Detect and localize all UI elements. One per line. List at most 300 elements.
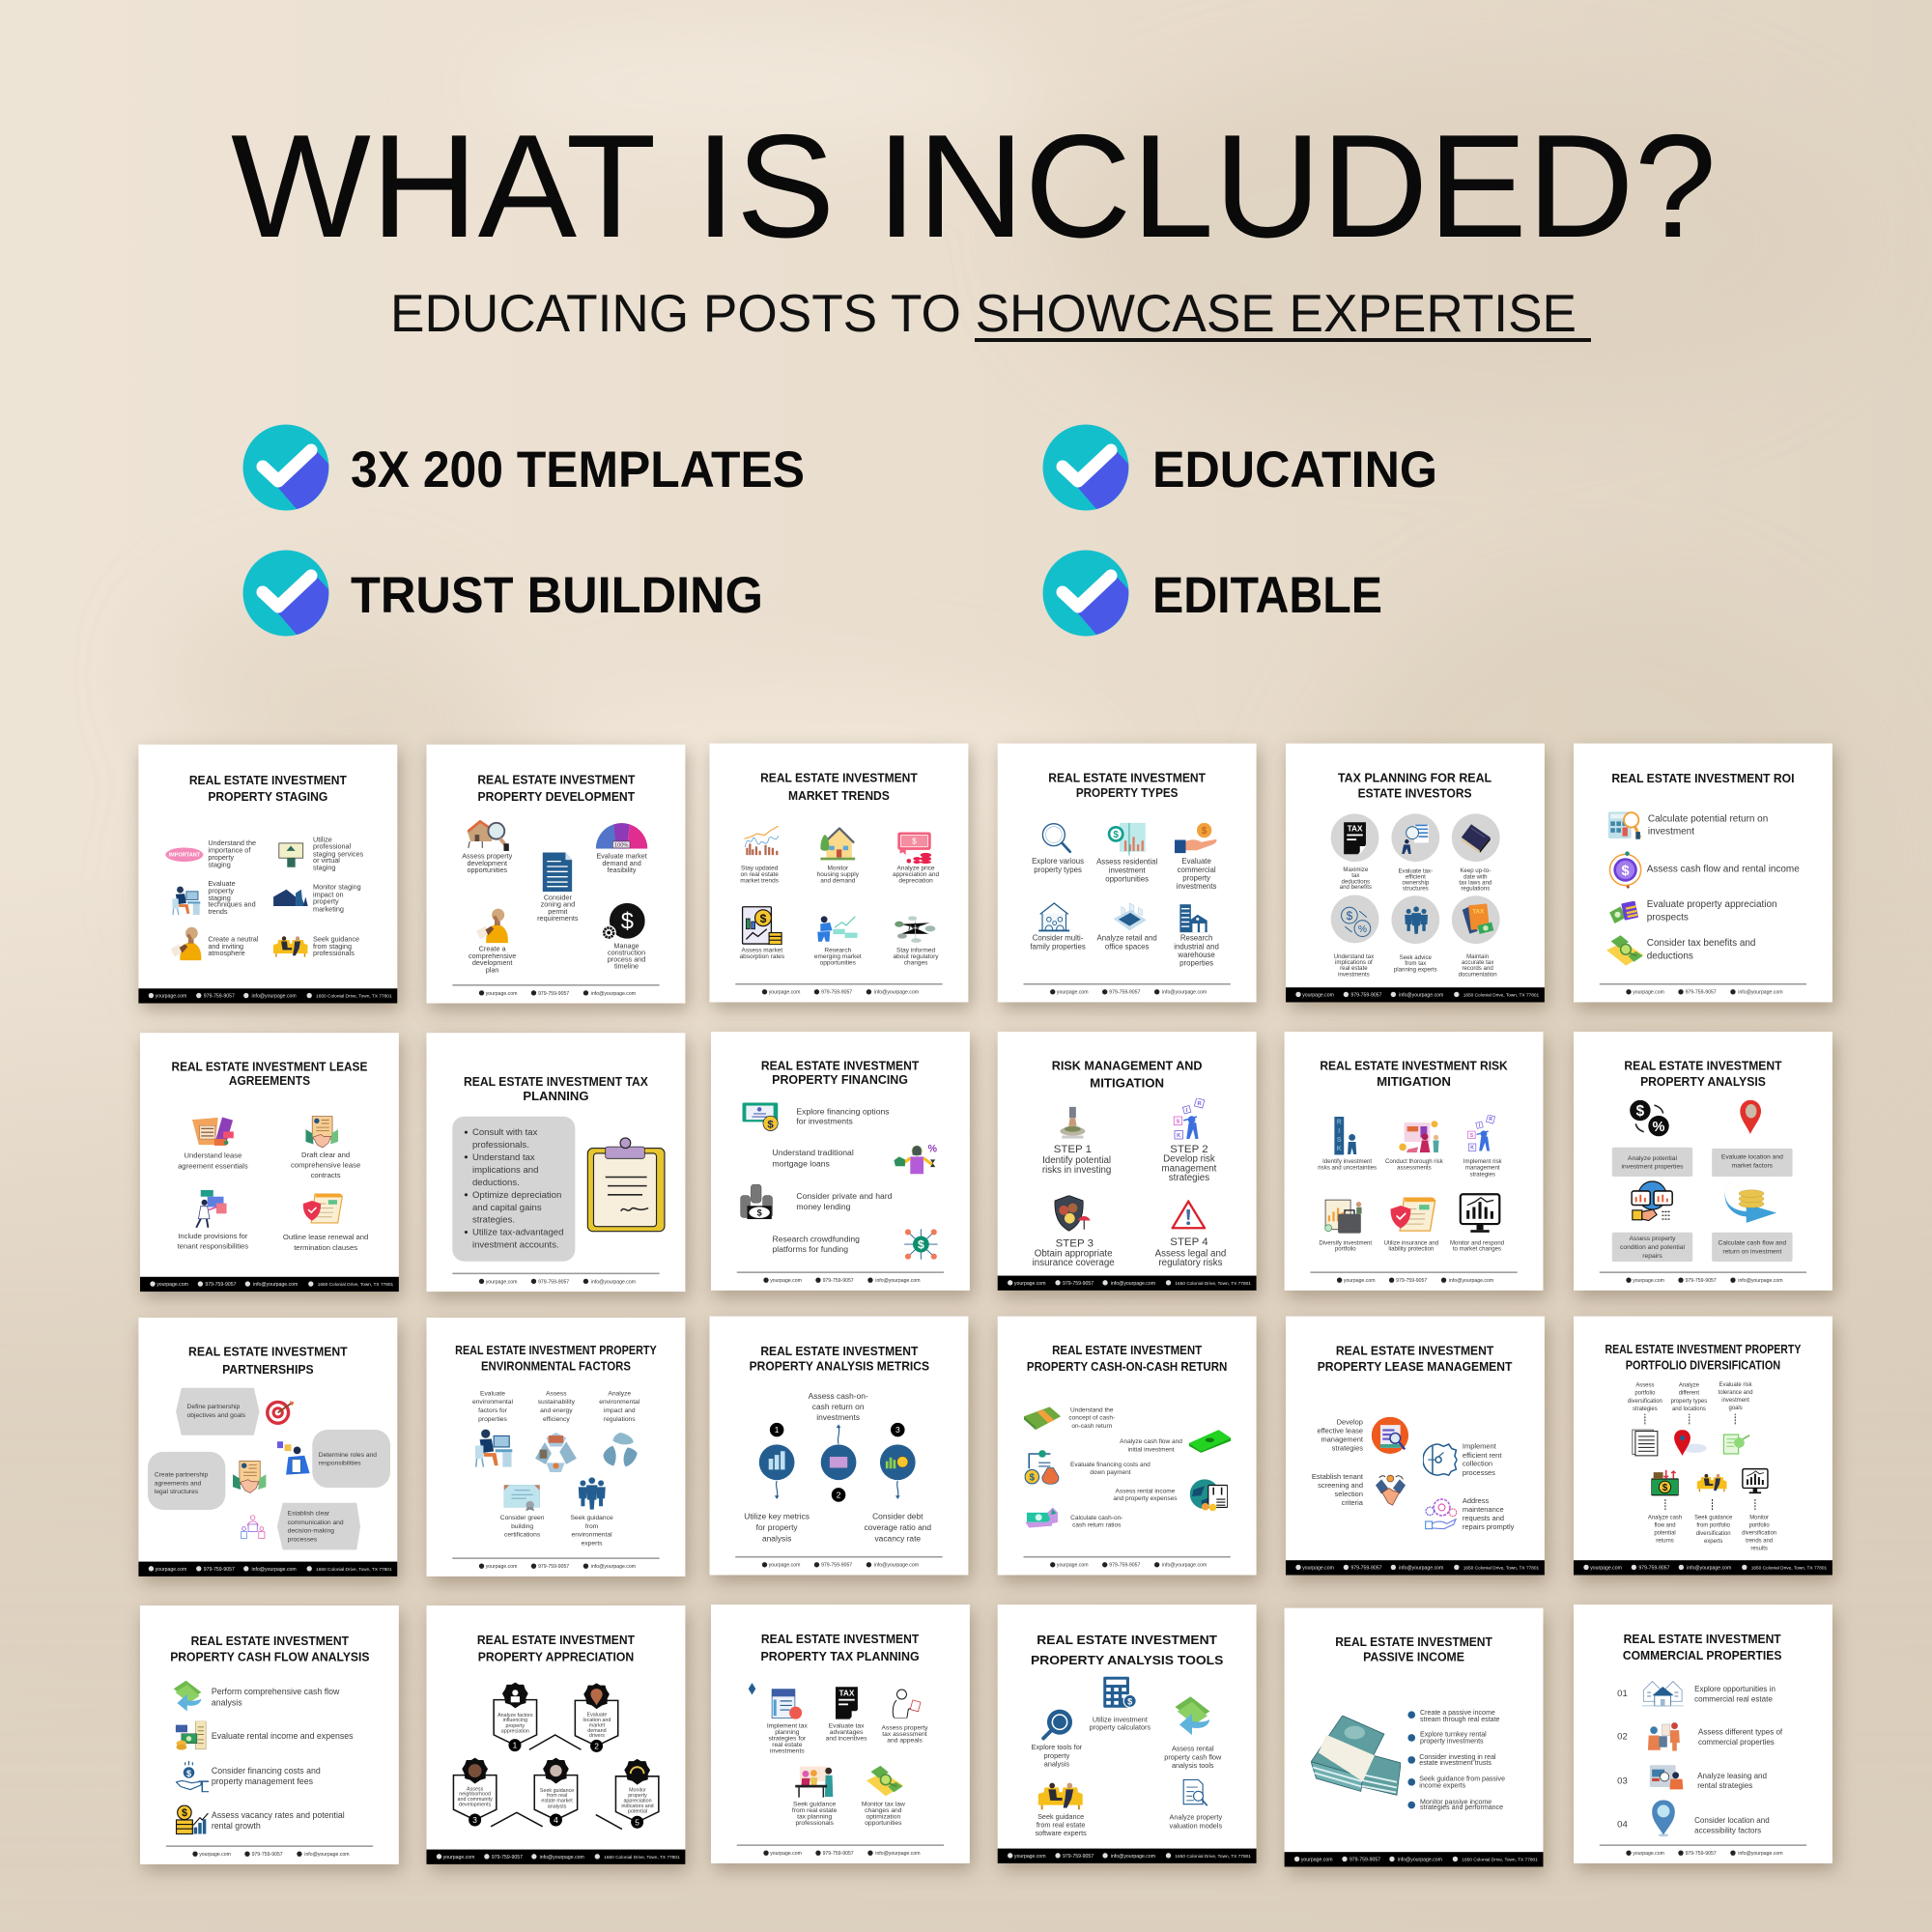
icon: green document [1723,1435,1749,1454]
text: development steps: requirements [537,914,579,923]
text: left labels: effective lease [1317,1427,1363,1435]
icon: teal money [1025,1507,1058,1528]
text: cash flow list: analysis [212,1697,242,1707]
text: development steps: process and [608,955,645,964]
text: development steps: feasibility [608,866,637,874]
footer bar: yourpage.com [443,1855,474,1861]
text: left labels: selection [1335,1490,1363,1498]
text: property labels: investment [1109,867,1146,875]
footer line and contacts: info@yourpage.com [1162,1563,1207,1569]
text: tax planning labels: and incentives [826,1735,867,1742]
text: lease labels: Outline lease renewal and [283,1233,368,1241]
text: tax labels: records and [1462,965,1493,972]
text: hexagon labels: property [506,1723,525,1729]
text: cash flow list: Perform comprehensive cash flow [212,1687,340,1696]
text: staging tips: impact on [313,890,344,898]
text: partnership labels: decision-making [288,1528,334,1535]
text: commercial labels: Consider location and [1694,1816,1770,1825]
grey bullet box: deductions. [472,1178,520,1188]
text: environmental labels: Analyze [608,1390,631,1397]
text: trend labels: appreciation and [893,871,939,878]
text: development steps: comprehensive [469,952,516,960]
text: property labels: investments [1177,882,1217,891]
text: environmental labels: environmental [572,1532,612,1539]
grey bullet box: investment accounts. [472,1240,559,1251]
text: analysis labels: Assess property [1630,1236,1676,1242]
footer bar: 1650 Colonial Drive, Town, TX 77801 [1462,1857,1538,1862]
footer bar: 979-759-9057 [204,1567,235,1573]
text: analysis labels: return on investment [1722,1249,1781,1256]
icon: people network [241,1516,265,1538]
panel: property appreciation: REAL ESTATE INVESTMENT [477,1634,635,1647]
footer bar: 979-759-9057 [1638,1565,1670,1571]
text: hexagon labels: property [628,1793,647,1799]
text: development steps: development [467,859,507,867]
text: right labels: Address [1463,1496,1490,1505]
text: income list: property investments [1420,1738,1484,1745]
text: staging tips: atmosphere [208,949,245,957]
text: roi list: Assess cash flow and rental income [1647,864,1800,874]
text: partnership labels: objectives and goals [187,1412,246,1419]
text: development steps: zoning and [541,900,575,909]
text: tax labels: regulations [1461,886,1490,893]
panel: property tax planning: REAL ESTATE INVESTMENT [761,1633,920,1646]
text: tax planning labels: professionals [795,1820,835,1827]
text: staging tips: Utilize [313,836,332,844]
grey bullet box: professionals. [472,1140,529,1151]
icon: globe and report [1190,1479,1228,1511]
icon: shield and document [1391,1198,1435,1231]
number badges: 4 [554,1815,558,1825]
text: commercial labels: accessibility factors [1694,1827,1761,1835]
panel: market trends: MARKET TRENDS [788,789,890,803]
text: tax labels: tax [1351,872,1359,879]
text: tax planning labels: Monitor tax law [862,1802,905,1808]
icon: red pin [1674,1430,1707,1456]
text: cash flow list: Assess vacancy rates and potential [212,1810,345,1820]
text: bottom labels: potential [1654,1530,1676,1536]
text: environmental labels: experts [582,1540,603,1547]
text: financing list: money lending [796,1202,851,1211]
text: roi list: investment [1648,827,1694,838]
panel: tax planning: REAL ESTATE INVESTMENT TAX [464,1075,648,1089]
footer bar [140,1277,399,1292]
panel: analysis metrics: PROPERTY ANALYSIS METRICS [750,1359,929,1373]
grey bullet box: and capital gains [472,1203,542,1213]
text: metric labels: Assess cash-on- [809,1391,868,1401]
text: step descriptions: Develop risk [1163,1154,1215,1165]
icon: dollar and percent [1630,1100,1669,1136]
text: hexagon labels: appreciation [501,1728,529,1734]
text: step descriptions: regulatory risks [1158,1258,1223,1268]
text: hexagon labels: market [589,1723,606,1729]
text: development steps: Consider [544,893,572,901]
icon: certificate [504,1485,540,1511]
text: hexagon labels: estate market [541,1799,573,1804]
text: development steps: construction [608,948,645,956]
text: tax labels: Seek advice [1400,954,1433,961]
text: development steps: Manage [613,942,639,951]
text: tax planning labels: from real estate [792,1807,838,1814]
number badges: 2 [594,1741,599,1750]
text: numbers: 04 [1617,1819,1628,1830]
text: step descriptions: management [1161,1163,1217,1174]
text: top labels: goals [1729,1406,1743,1411]
text: mitigation labels: strategies [1469,1171,1495,1178]
text: development steps: Create a [479,945,507,953]
blue metric circles with arrows [759,1424,916,1499]
text: left labels: strategies [1332,1444,1363,1453]
footer bar [998,1849,1257,1863]
text: property labels: Assess residential [1096,858,1157,867]
footer line and contacts: 979-759-9057 [823,1851,854,1857]
footer line and contacts: yourpage.com [486,991,517,997]
panel: analysis metrics: REAL ESTATE INVESTMENT [760,1345,919,1358]
feature: 3x 200 templates: 3X 200 TEMPLATES [351,441,805,498]
footer bar: 979-759-9057 [1350,1565,1382,1571]
icon: bright bill [1189,1430,1231,1453]
grey label shapes [148,1388,390,1549]
footer line and contacts: info@yourpage.com [874,1563,919,1569]
text: bottom labels: Monitor [1749,1515,1769,1520]
text: staging tips: trends [208,907,228,916]
icon: couch [1697,1474,1726,1492]
icon: tax document [1344,822,1366,854]
grey bullet box: Optimize depreciation [472,1190,561,1201]
text: return labels: Calculate cash-on- [1070,1515,1122,1521]
text: analysis labels: Calculate cash flow and [1719,1239,1786,1246]
text: tax planning labels: tax planning [797,1814,832,1821]
footer line and contacts [737,1271,944,1284]
text: step descriptions: Identify potential [1042,1155,1111,1166]
text: left labels: screening and [1318,1481,1363,1490]
text: commercial labels: Assess different types of [1698,1728,1783,1737]
text: lease labels: agreement essentials [178,1161,248,1170]
text: tax labels: Maintain [1466,953,1489,960]
footer line and contacts: info@yourpage.com [1449,1278,1493,1284]
footer line and contacts: info@yourpage.com [874,990,919,996]
text: mitigation labels: management [1465,1165,1500,1172]
text: income list: Consider investing in real [1419,1754,1496,1761]
text: return labels: Understand the [1070,1407,1114,1414]
icon: hand and dollar [177,1761,209,1792]
footer line and contacts [1310,1271,1518,1284]
text: roi list: prospects [1647,913,1689,923]
text: right labels: maintenance [1463,1505,1504,1514]
text: roi list: deductions [1647,951,1693,961]
panel: property types: PROPERTY TYPES [1076,786,1178,800]
text: mitigation labels: Utilize insurance and [1384,1239,1438,1246]
text: bottom labels: returns [1656,1538,1674,1544]
panel: commercial properties: REAL ESTATE INVESTMENT [1624,1633,1781,1646]
icon: clipboard [587,1138,665,1232]
footer line and contacts [737,1844,944,1857]
footer bar: 979-759-9057 [1350,992,1382,998]
text: partnership labels: Establish clear [288,1511,330,1518]
text: development steps: timeline [614,962,639,971]
text: tax labels: tax laws and [1459,879,1492,886]
text: steps: STEP 1 [1054,1144,1092,1155]
icon: warehouse [1179,904,1208,932]
text: environmental labels: impact and [604,1407,636,1414]
black number badges: 3 [895,1425,900,1435]
text: tax labels: planning experts [1394,966,1437,973]
text: income list: Explore turnkey rental [1420,1731,1487,1738]
text: tax labels: Keep up-to- [1460,867,1491,874]
text: trend labels: Monitor [827,865,849,871]
icon: book [1462,824,1491,853]
text: top labels: and locations [1672,1406,1706,1412]
feature: editable: EDITABLE [1152,567,1382,624]
footer bar [138,1562,397,1577]
icon: blue pin [1652,1800,1675,1836]
icon: risk blocks [1334,1117,1356,1154]
text: financing list: Consider private and hard [796,1191,893,1201]
text: tax planning labels: Implement tax [767,1722,808,1729]
panel: risk mitigation: REAL ESTATE INVESTMENT RISK [1320,1059,1508,1072]
icon: woman with options [894,1144,937,1174]
text: staging tips: property [313,897,339,906]
text: metric labels: for property [756,1522,798,1532]
icon: market chart [744,826,779,855]
text: property labels: office spaces [1105,942,1150,951]
grey label boxes [1612,1148,1793,1262]
footer line and contacts: info@yourpage.com [1738,990,1783,996]
panel: cash flow analysis [140,1605,402,1871]
icon: green money [1024,1406,1061,1430]
icon: monitors [1632,1181,1672,1221]
icon: people [1648,1722,1680,1751]
footer bar [427,1850,685,1864]
text: property labels: property types [1034,866,1082,874]
text: staging tips: professional [313,842,352,851]
text: tax labels: Evaluate tax- [1398,868,1433,875]
text: top labels: Analyze [1679,1383,1700,1389]
text: analysis labels: condition and potential [1620,1244,1685,1251]
text: metric labels: cash return on [812,1402,865,1411]
text: analysis labels: market factors [1732,1162,1774,1169]
footer bar: 1650 Colonial Drive, Town, TX 77801 [1751,1565,1828,1571]
icon: map [1606,935,1643,966]
icon: warning triangle [1173,1202,1205,1228]
footer line and contacts: 979-759-9057 [538,1564,569,1570]
footer bar [1574,1560,1833,1575]
icon: purple coin [1610,851,1641,889]
panel: property financing [711,1032,973,1297]
grey bullet box: implications and [472,1165,538,1176]
icon: money with arrows [1651,1470,1679,1495]
panel: partnerships: REAL ESTATE INVESTMENT [188,1345,348,1358]
icon: house [820,828,855,860]
footer bar: 1650 Colonial Drive, Town, TX 77801 [318,1282,394,1288]
footer line and contacts: 979-759-9057 [538,1279,569,1285]
text: bottom labels: results [1750,1546,1768,1551]
text: income list: income experts [1419,1783,1466,1790]
text: commercial labels: rental strategies [1697,1781,1752,1790]
icon: price card [897,832,931,864]
icon: document [543,852,572,892]
icon: documents [1633,1430,1658,1456]
panel: analysis tools [998,1605,1260,1870]
panel: portfolio diversification: PORTFOLIO DIVERSIFICATION [1626,1358,1780,1372]
text: tax labels: date with [1463,873,1488,880]
text: partnership labels: Define partnership [187,1404,240,1410]
footer line and contacts: yourpage.com [769,990,800,996]
icon: people and board [1399,1121,1439,1152]
text: tax planning labels: tax assessment [882,1731,927,1738]
text: staging tips: from staging [313,942,352,951]
text: property labels: industrial and [1174,942,1219,951]
text: trend labels: Stay updated [741,865,779,871]
text: development steps: Evaluate market [596,852,647,861]
text: environmental labels: Consider green [500,1515,545,1521]
icon: gauge [596,823,647,849]
footer line and contacts: yourpage.com [769,1563,800,1569]
text: left labels: management [1321,1435,1364,1444]
footer line and contacts [452,1273,660,1285]
panel: cash flow analysis: REAL ESTATE INVESTMENT [191,1634,349,1648]
panel: property development: REAL ESTATE INVESTMENT [477,774,636,787]
icon: leaves [603,1433,638,1466]
text: trend labels: depreciation [898,877,933,884]
footer line and contacts: 979-759-9057 [1686,1851,1717,1857]
footer line and contacts: 979-759-9057 [821,990,852,996]
text: income list: Seek guidance from passive [1419,1776,1505,1783]
text: roi list: Consider tax benefits and [1647,938,1755,949]
icon: isometric office [1113,903,1147,930]
icon: important cloud [165,847,203,862]
footer line and contacts [735,1556,943,1569]
text: return labels: concept of cash- [1068,1415,1115,1422]
icon: stack of money [1311,1716,1401,1795]
text: property labels: Evaluate [1181,857,1211,866]
panel: cash flow analysis: PROPERTY CASH FLOW ANALYSIS [170,1650,369,1663]
text: development steps: development [472,958,512,967]
panel: property types [998,744,1260,1009]
text: tool labels: analysis [1044,1760,1069,1769]
text: right labels: collection [1463,1460,1492,1468]
icon: document and magnifier [1183,1779,1208,1805]
footer line and contacts: 979-759-9057 [538,991,569,997]
icon: tax pad [772,1690,802,1719]
text: top labels: strategies [1633,1406,1658,1412]
grey bullet box: Utilize tax-advantaged [472,1228,563,1238]
footer line and contacts: yourpage.com [1633,1278,1664,1284]
footer line and contacts [1600,1271,1806,1284]
grey bullet box: Consult with tax [472,1127,538,1138]
text: cash flow list: Consider financing costs and [212,1766,321,1776]
panel: analysis tools: REAL ESTATE INVESTMENT [1037,1634,1217,1647]
footer bar [998,1276,1257,1291]
icon: money and arrow [1175,1696,1209,1735]
text: trend labels: market trends [740,877,780,884]
footer bar: 1650 Colonial Drive, Town, TX 77801 [316,1567,392,1573]
footer bar: yourpage.com [156,993,186,999]
text: environmental labels: from [585,1523,599,1530]
text: top labels: property types [1671,1399,1707,1405]
footer line and contacts: yourpage.com [486,1564,517,1570]
panel: property staging: REAL ESTATE INVESTMENT [189,774,347,787]
panel: tax planning for investors [1286,744,1548,1009]
text: hexagon labels: indicators and [621,1804,654,1809]
text: tax planning labels: optimization [866,1814,900,1821]
icon: blue sparkle [749,1683,755,1694]
text: top labels: investment [1721,1398,1749,1404]
footer line and contacts: 979-759-9057 [821,1563,852,1569]
footer bar [138,988,397,1004]
text: staging tips: staging [208,894,231,902]
text: analysis labels: investment properties [1622,1164,1684,1171]
text: mitigation labels: Conduct thorough risk [1385,1158,1444,1165]
text: tool labels: analysis tools [1172,1761,1214,1770]
text: trend labels: changes [904,959,928,966]
text: property labels: commercial [1178,866,1216,874]
panel: investment roi [1574,744,1835,1009]
text: staging tips: staging services [313,849,363,858]
footer bar: 1650 Colonial Drive, Town, TX 77801 [1463,1565,1540,1571]
icon: person at desk [475,1430,512,1467]
text: tax labels: implications of [1335,959,1373,966]
text: hexagon labels: location and [583,1718,611,1723]
text: roi list: Evaluate property appreciation [1647,899,1777,910]
text: partnership labels: processes [288,1537,318,1544]
panel: commercial properties [1574,1605,1835,1870]
panel: risk management: RISK MANAGEMENT AND [1052,1059,1203,1072]
footer bar: 1650 Colonial Drive, Town, TX 77801 [316,993,392,999]
text: return labels: Evaluate financing costs and [1070,1462,1151,1468]
icon: briefcase [1325,1200,1362,1234]
text: roi list: Calculate potential return on [1648,813,1768,824]
text: staging tips: professionals [313,949,355,957]
subtitle with underline: EDUCATING POSTS TO SHOWCASE EXPERTISE [390,283,1577,343]
icon: shield and document [303,1194,342,1223]
text: financing list: mortgage loans [773,1158,830,1168]
icon: target [266,1401,295,1425]
text: trend labels: on real estate [740,871,779,878]
icon: person with chart [817,916,858,942]
text: environmental labels: efficiency [543,1416,570,1423]
text: metric labels: analysis [762,1533,791,1543]
panel: property types: REAL ESTATE INVESTMENT [1048,771,1206,784]
text: hexagon labels: and community [458,1797,493,1803]
panel: property tax planning: PROPERTY TAX PLANNING [760,1650,920,1663]
text: trend labels: emerging market [814,953,862,960]
icon: coins and bars [177,1805,208,1834]
panel: lease management [1286,1317,1548,1581]
text: bottom labels: from portfolio [1696,1523,1731,1529]
text: trend labels: about regulatory [894,953,939,960]
text: tool labels: from real estate [1037,1820,1085,1829]
text: commercial labels: commercial real estate [1694,1694,1773,1703]
number badges: 1 [513,1741,518,1750]
text: tax labels: documentation [1459,971,1497,978]
text: return labels: down payment [1090,1469,1131,1476]
text: staging tips: Monitor staging [313,883,361,892]
text: commercial labels: Explore opportunities in [1694,1685,1776,1693]
text: tool labels: valuation models [1170,1822,1222,1831]
text: step descriptions: Obtain appropriate [1035,1249,1113,1260]
panel: risk mitigation: MITIGATION [1377,1075,1451,1089]
black number badges: 2 [837,1491,841,1500]
icon: hand and coins [1060,1107,1085,1139]
footer line and contacts [735,983,943,996]
text: tax labels: and benefits [1340,884,1372,891]
text: income list: Create a passive income [1420,1710,1495,1717]
panel: passive income: REAL ESTATE INVESTMENT [1335,1635,1492,1649]
grey bullet box [452,1117,575,1262]
text: cash flow list: rental growth [212,1821,261,1831]
text: left labels: Develop [1337,1418,1363,1427]
